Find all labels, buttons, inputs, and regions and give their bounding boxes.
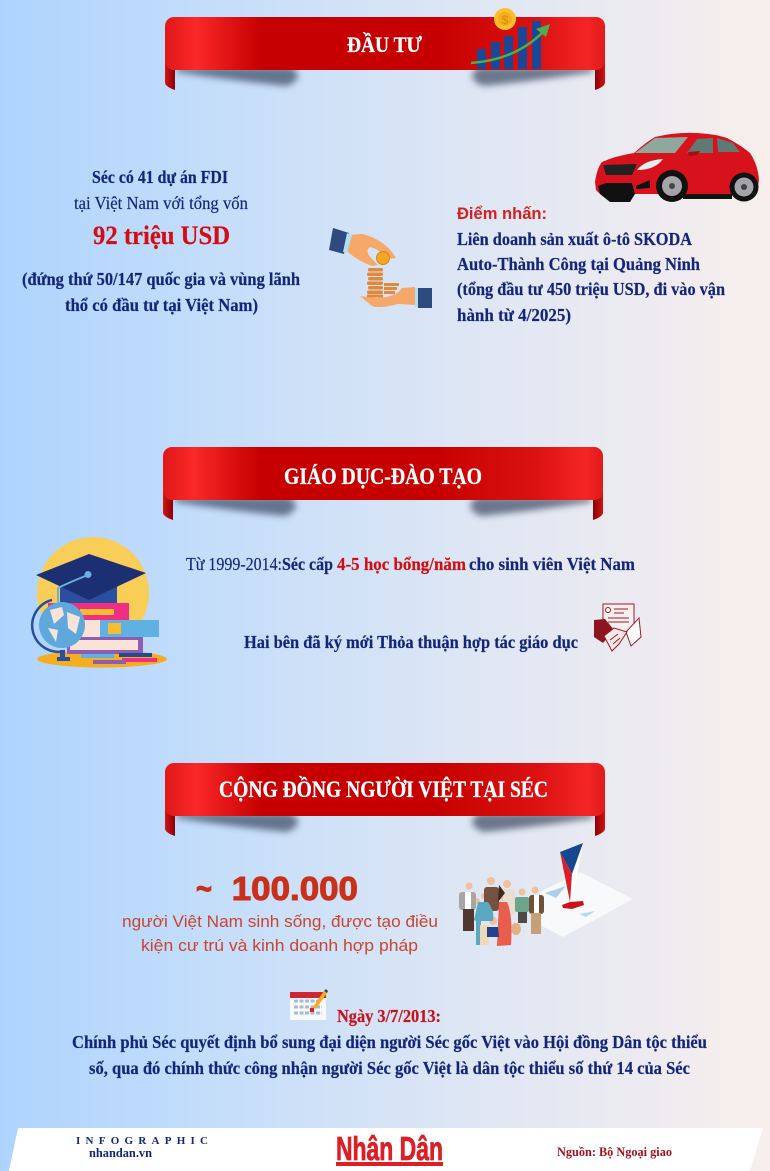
footer <box>9 1128 763 1171</box>
text block: Điểm nhấn: Auto-Thành Công tại Quảng Ninh <box>457 254 700 274</box>
icon: calendar with pencil <box>290 989 328 1020</box>
text: education agreement: Hai bên đã ký mới Thỏa thuận hợp tác giáo dục <box>244 632 578 652</box>
text: scholarships: cho sinh viên Việt Nam <box>469 554 635 574</box>
text block: FDI: (đứng thứ 50/147 quốc gia và vùng lãnh <box>22 269 300 289</box>
text block: FDI: tại Việt Nam với tổng vốn <box>74 193 248 213</box>
banner: Đầu tư: ĐẦU TƯ <box>347 32 422 57</box>
icon: hands and coins <box>329 228 432 308</box>
text block: community size: kiện cư trú và kinh doanh hợp pháp <box>141 936 418 955</box>
footer: INFOGRAPHIC <box>76 1135 208 1147</box>
banner: Giáo dục-Đào tạo <box>163 447 603 520</box>
footer: Nguồn: Bộ Ngoại giao <box>557 1144 672 1159</box>
text block: Điểm nhấn: Liên doanh sản xuất ô-tô SKODA <box>457 229 692 249</box>
text: scholarships: 4-5 học bổng/năm <box>337 554 466 574</box>
banner: Giáo dục-Đào tạo: GIÁO DỤC-ĐÀO TẠO <box>284 464 482 489</box>
text block: community size: ~ <box>196 870 212 907</box>
text: scholarships: Séc cấp <box>282 554 333 574</box>
icon: growth chart with coin: $ <box>502 13 509 27</box>
text block: community size <box>122 870 438 955</box>
icon: graduation cap, books and globe <box>32 537 167 668</box>
text block: community size: 100.000 <box>222 870 358 907</box>
text block: 3/7/2013 recognition: số, qua đó chính thức công nhận người Séc gốc Việt là dân tộc thiểu số thứ 14 của Séc <box>89 1058 690 1078</box>
banner: Cộng đồng người Việt tại Séc: CỘNG ĐỒNG NGƯỜI VIỆT TẠI SÉC <box>219 776 548 802</box>
text: scholarships <box>186 554 635 574</box>
text block: FDI <box>22 167 300 315</box>
icon: Vietnamese family group <box>459 877 544 946</box>
text block: 3/7/2013 recognition: Ngày 3/7/2013: <box>337 1006 441 1026</box>
icon: agreement handshake <box>594 604 641 651</box>
icon: growth chart with coin <box>471 8 550 69</box>
text block: community size: người Việt Nam sinh sống, được tạo điều <box>122 912 438 931</box>
icon: red car <box>595 133 759 202</box>
text block: FDI: thổ có đầu tư tại Việt Nam) <box>65 295 258 315</box>
text block: 3/7/2013 recognition <box>72 1006 707 1078</box>
icon: map with Czech flag pin <box>540 843 633 937</box>
text block: Điểm nhấn: hành từ 4/2025) <box>457 305 571 325</box>
text block: FDI: Séc có 41 dự án FDI <box>92 167 228 187</box>
text: scholarships: Từ 1999-2014: <box>186 554 282 574</box>
footer: Nhân Dân <box>336 1130 443 1167</box>
text block: Điểm nhấn <box>457 204 725 325</box>
text block: 3/7/2013 recognition: Chính phủ Séc quyết định bổ sung đại diện người Séc gốc Việt vào Hội đồng Dân tộc thiểu <box>72 1032 707 1052</box>
text block: Điểm nhấn: Điểm nhấn: <box>457 204 547 223</box>
text block: FDI: 92 triệu USD <box>93 221 230 250</box>
text block: Điểm nhấn: (tổng đầu tư 450 triệu USD, đi vào vận <box>457 279 725 299</box>
banner: Đầu tư <box>165 17 605 90</box>
footer: nhandan.vn <box>89 1145 153 1160</box>
banner: Cộng đồng người Việt tại Séc <box>165 763 605 836</box>
